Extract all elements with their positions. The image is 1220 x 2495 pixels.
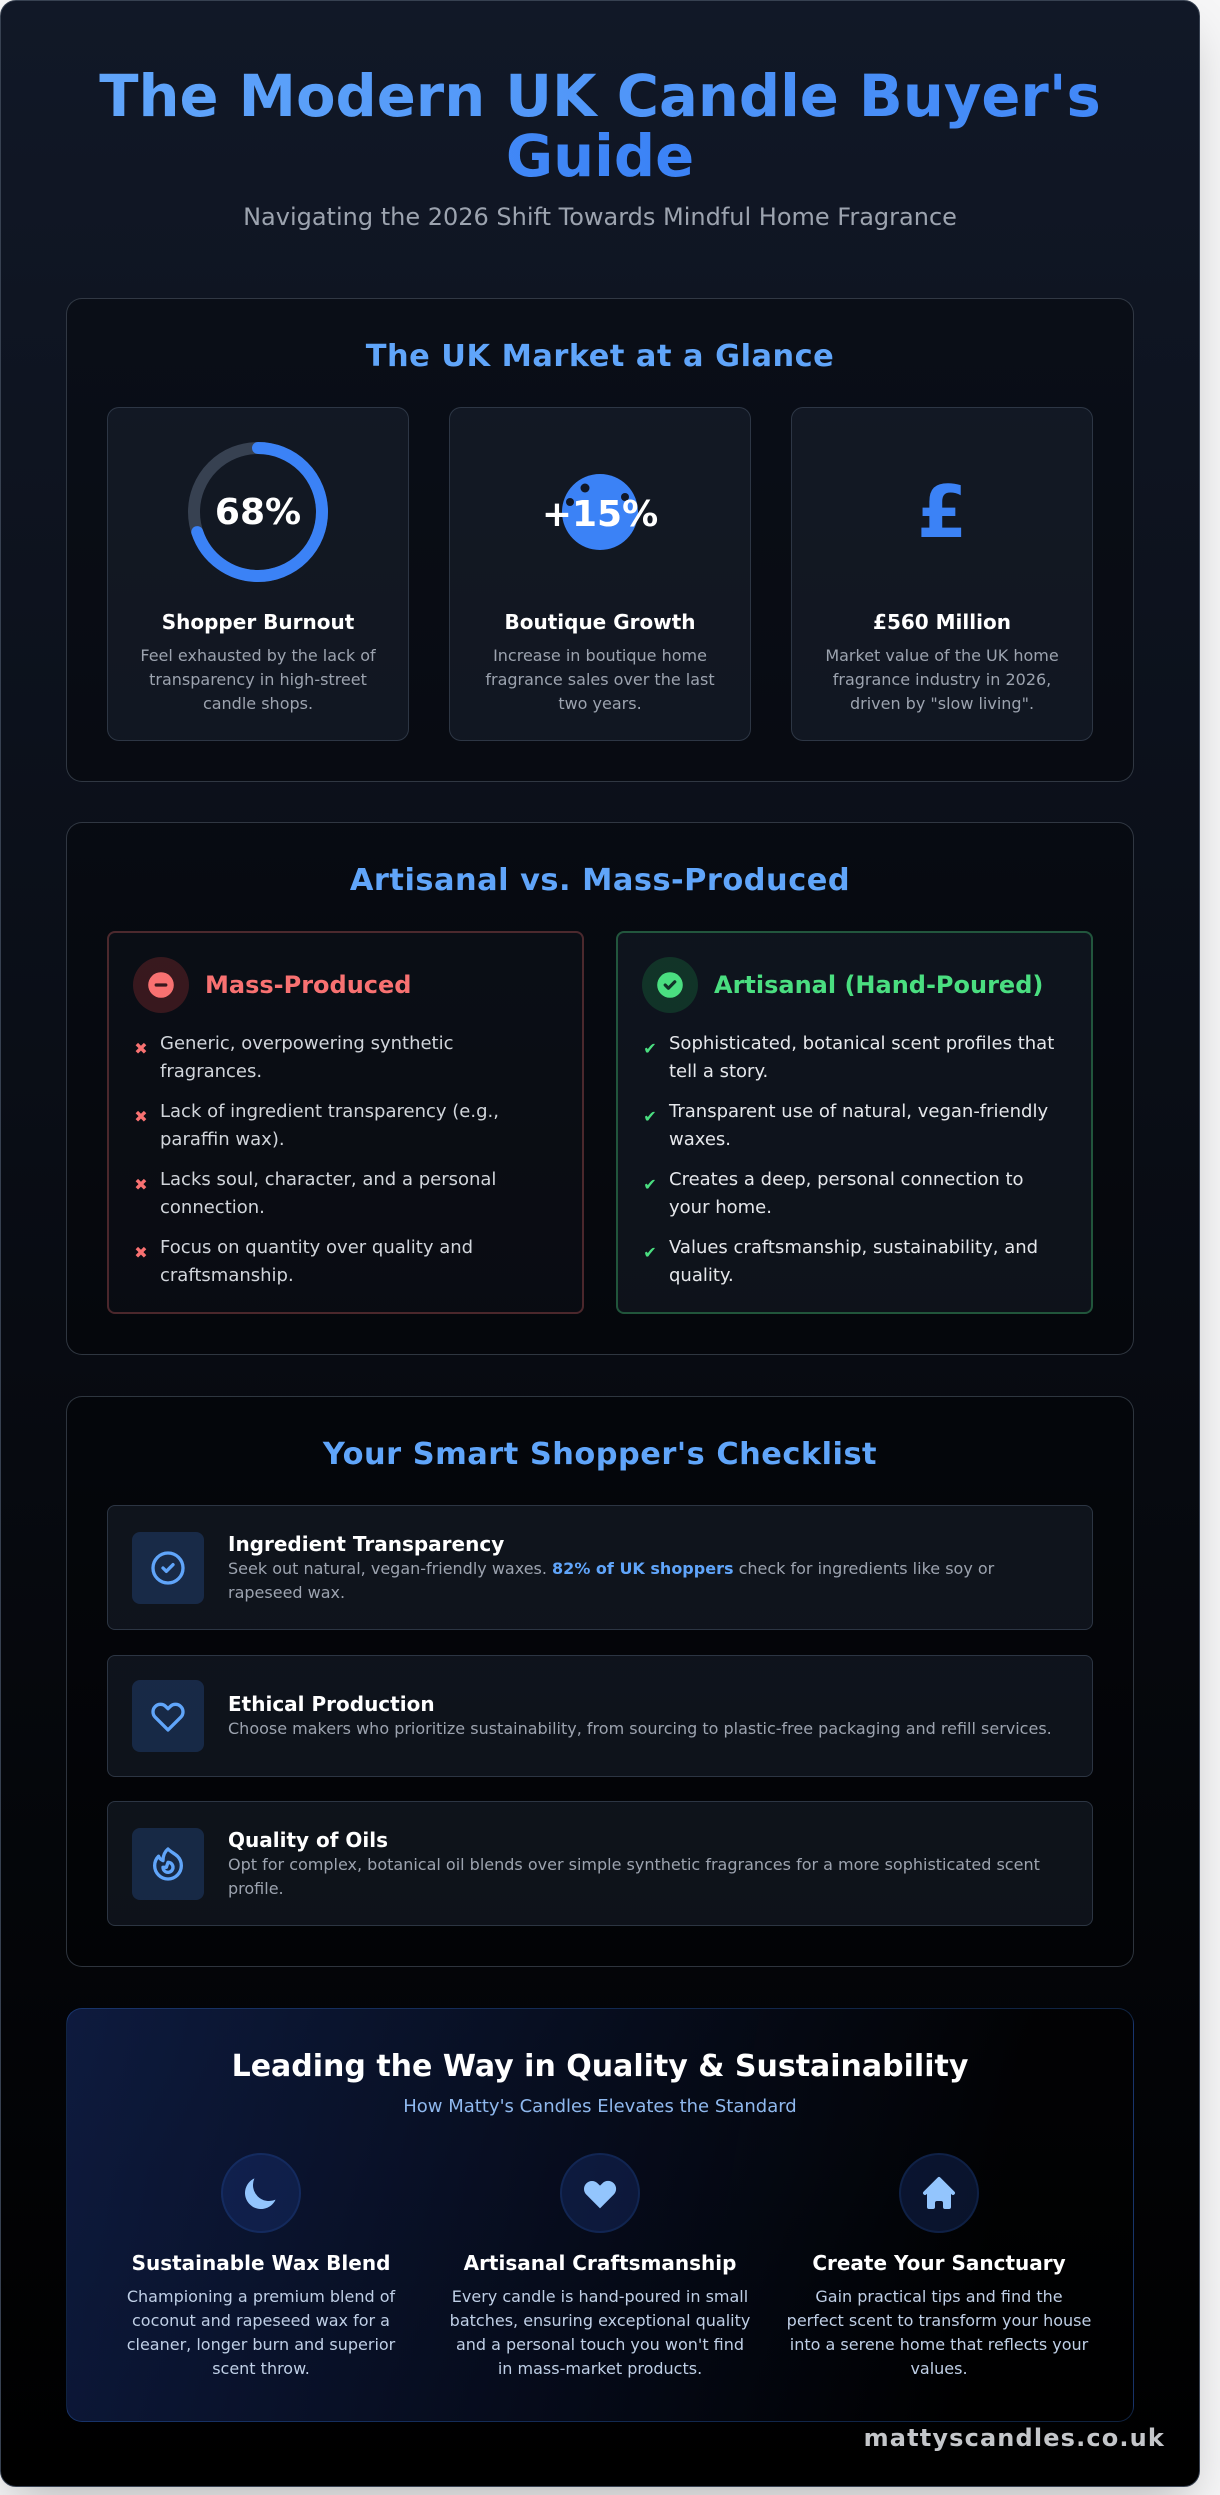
icon: pound sign: £ [917, 470, 967, 554]
list item [643, 1033, 1054, 1082]
list item [134, 1169, 496, 1218]
checklist item: ingredient transparency [107, 1505, 1093, 1630]
icon: heart outline [132, 1680, 204, 1752]
stat description: fragrance industry in 2026, [833, 670, 1051, 689]
list item: paraffin wax). [160, 1129, 285, 1150]
feature title: Sustainable Wax Blend [132, 2251, 390, 2275]
donut chart: 68%: 68% [215, 492, 301, 533]
column: artisanal: ✔ [643, 1039, 657, 1058]
stat description [140, 646, 376, 713]
list item: your home. [669, 1197, 772, 1218]
heading: market: The UK Market at a Glance [366, 339, 834, 374]
list item: Sophisticated, botanical scent profiles that [669, 1033, 1054, 1054]
item title: Ingredient Transparency [228, 1532, 504, 1556]
title [99, 63, 1101, 190]
stat description: candle shops. [203, 694, 313, 713]
list item: fragrances. [160, 1061, 262, 1082]
checklist item: ethical production [107, 1655, 1093, 1777]
list item: tell a story. [669, 1061, 768, 1082]
icon: moon [221, 2153, 301, 2233]
list item [643, 1101, 1048, 1150]
stat description [825, 646, 1059, 713]
stat title: Shopper Burnout [162, 610, 354, 634]
feature description: into a serene home that reflects your [790, 2335, 1088, 2354]
icon: bubbling circle with +15%: +15% [542, 494, 658, 535]
stat title: Boutique Growth [504, 610, 696, 634]
column: artisanal: ✔ [643, 1175, 657, 1194]
title: Guide [506, 123, 694, 190]
stat title: £560 Million [873, 610, 1011, 634]
feature description: perfect scent to transform your house [787, 2311, 1091, 2330]
heading: comparison: Artisanal vs. Mass-Produced [350, 863, 850, 898]
list item [134, 1101, 499, 1150]
icon: check circle [642, 957, 698, 1013]
title: The Modern UK Candle Buyer's [99, 63, 1101, 130]
column: artisanal: ✔ [643, 1107, 657, 1126]
panel: UK market at a glance [66, 298, 1134, 782]
item description [228, 1855, 1040, 1898]
feature description: cleaner, longer burn and superior [127, 2335, 395, 2354]
stat description: Feel exhausted by the lack of [140, 646, 376, 665]
item description [228, 1559, 994, 1602]
list item [643, 1169, 1024, 1218]
column: artisanal [616, 931, 1093, 1314]
feature description: Gain practical tips and find the [815, 2287, 1063, 2306]
list item [134, 1237, 473, 1286]
list item: craftsmanship. [160, 1265, 294, 1286]
stat description: Increase in boutique home [493, 646, 707, 665]
item description: profile. [228, 1879, 284, 1898]
item title: Quality of Oils [228, 1828, 388, 1852]
feature description [787, 2287, 1091, 2378]
checklist item: quality of oils [107, 1801, 1093, 1926]
stat description: two years. [558, 694, 642, 713]
subtitle: Navigating the 2026 Shift Towards Mindful Home Fragrance [243, 203, 957, 231]
panel: leading the way [66, 2008, 1134, 2422]
feature description: in mass-market products. [498, 2359, 702, 2378]
item description: Opt for complex, botanical oil blends over simple synthetic fragrances for a more sophisticated scent [228, 1855, 1040, 1874]
donut chart: 68% [188, 442, 328, 582]
icon: bubbling circle with +15% [542, 474, 658, 550]
icon: flame outline [132, 1828, 204, 1900]
column: mass-produced: ✖ [134, 1039, 148, 1058]
stat description [485, 646, 715, 713]
stat card: boutique growth [449, 407, 751, 741]
feature description [450, 2287, 750, 2378]
list item: Focus on quantity over quality and [160, 1237, 473, 1258]
heading: leading the way: Leading the Way in Quality & Sustainability [232, 2049, 968, 2084]
feature title: Artisanal Craftsmanship [464, 2251, 736, 2275]
item description: Choose makers who prioritize sustainability, from sourcing to plastic-free packaging and refill services. [228, 1719, 1052, 1738]
heading: checklist: Your Smart Shopper's Checklist [323, 1437, 877, 1472]
column heading: Mass-Produced [205, 971, 411, 999]
column: mass-produced [107, 931, 584, 1314]
panel: smart shopper's checklist [66, 1396, 1134, 1967]
subheading: How Matty's Candles Elevates the Standard [403, 2096, 797, 2117]
item title: Ethical Production [228, 1692, 435, 1716]
icon: heart [560, 2153, 640, 2233]
icon: house [899, 2153, 979, 2233]
feature description: batches, ensuring exceptional quality [450, 2311, 750, 2330]
feature description: scent throw. [212, 2359, 310, 2378]
icon: check circle outline [132, 1532, 204, 1604]
list item: Generic, overpowering synthetic [160, 1033, 454, 1054]
feature description: coconut and rapeseed wax for a [132, 2311, 390, 2330]
feature description [127, 2287, 396, 2378]
column heading: Artisanal (Hand-Poured) [714, 971, 1043, 999]
feature title: Create Your Sanctuary [812, 2251, 1066, 2275]
feature description: and a personal touch you won't find [456, 2335, 744, 2354]
list item: Transparent use of natural, vegan-friendly [669, 1101, 1048, 1122]
stat description: transparency in high-street [149, 670, 367, 689]
column: mass-produced: ✖ [134, 1175, 148, 1194]
stat description: Market value of the UK home [825, 646, 1059, 665]
stat card: shopper burnout [107, 407, 409, 741]
column: mass-produced: ✖ [134, 1107, 148, 1126]
list item: Lacks soul, character, and a personal [160, 1169, 496, 1190]
list item: waxes. [669, 1129, 731, 1150]
list item: connection. [160, 1197, 265, 1218]
list item [643, 1237, 1038, 1286]
stat description: driven by "slow living". [850, 694, 1034, 713]
list item: Values craftsmanship, sustainability, and [669, 1237, 1038, 1258]
list item: Lack of ingredient transparency (e.g., [160, 1101, 499, 1122]
list item: quality. [669, 1265, 734, 1286]
icon: minus circle [133, 957, 189, 1013]
stat card: market value [791, 407, 1093, 741]
feature description: Championing a premium blend of [127, 2287, 395, 2306]
column: mass-produced: ✖ [134, 1243, 148, 1262]
footer: website: mattyscandles.co.uk [864, 2424, 1165, 2452]
panel: artisanal vs mass-produced [66, 822, 1134, 1355]
list item: Creates a deep, personal connection to [669, 1169, 1024, 1190]
item description: rapeseed wax. [228, 1583, 345, 1602]
column: artisanal: ✔ [643, 1243, 657, 1262]
list item [134, 1033, 454, 1082]
feature description: values. [910, 2359, 968, 2378]
item description: Seek out natural, vegan-friendly waxes. 82% of UK shoppers check for ingredients like soy or [228, 1559, 994, 1578]
feature description: Every candle is hand-poured in small [452, 2287, 748, 2306]
stat description: fragrance sales over the last [485, 670, 715, 689]
